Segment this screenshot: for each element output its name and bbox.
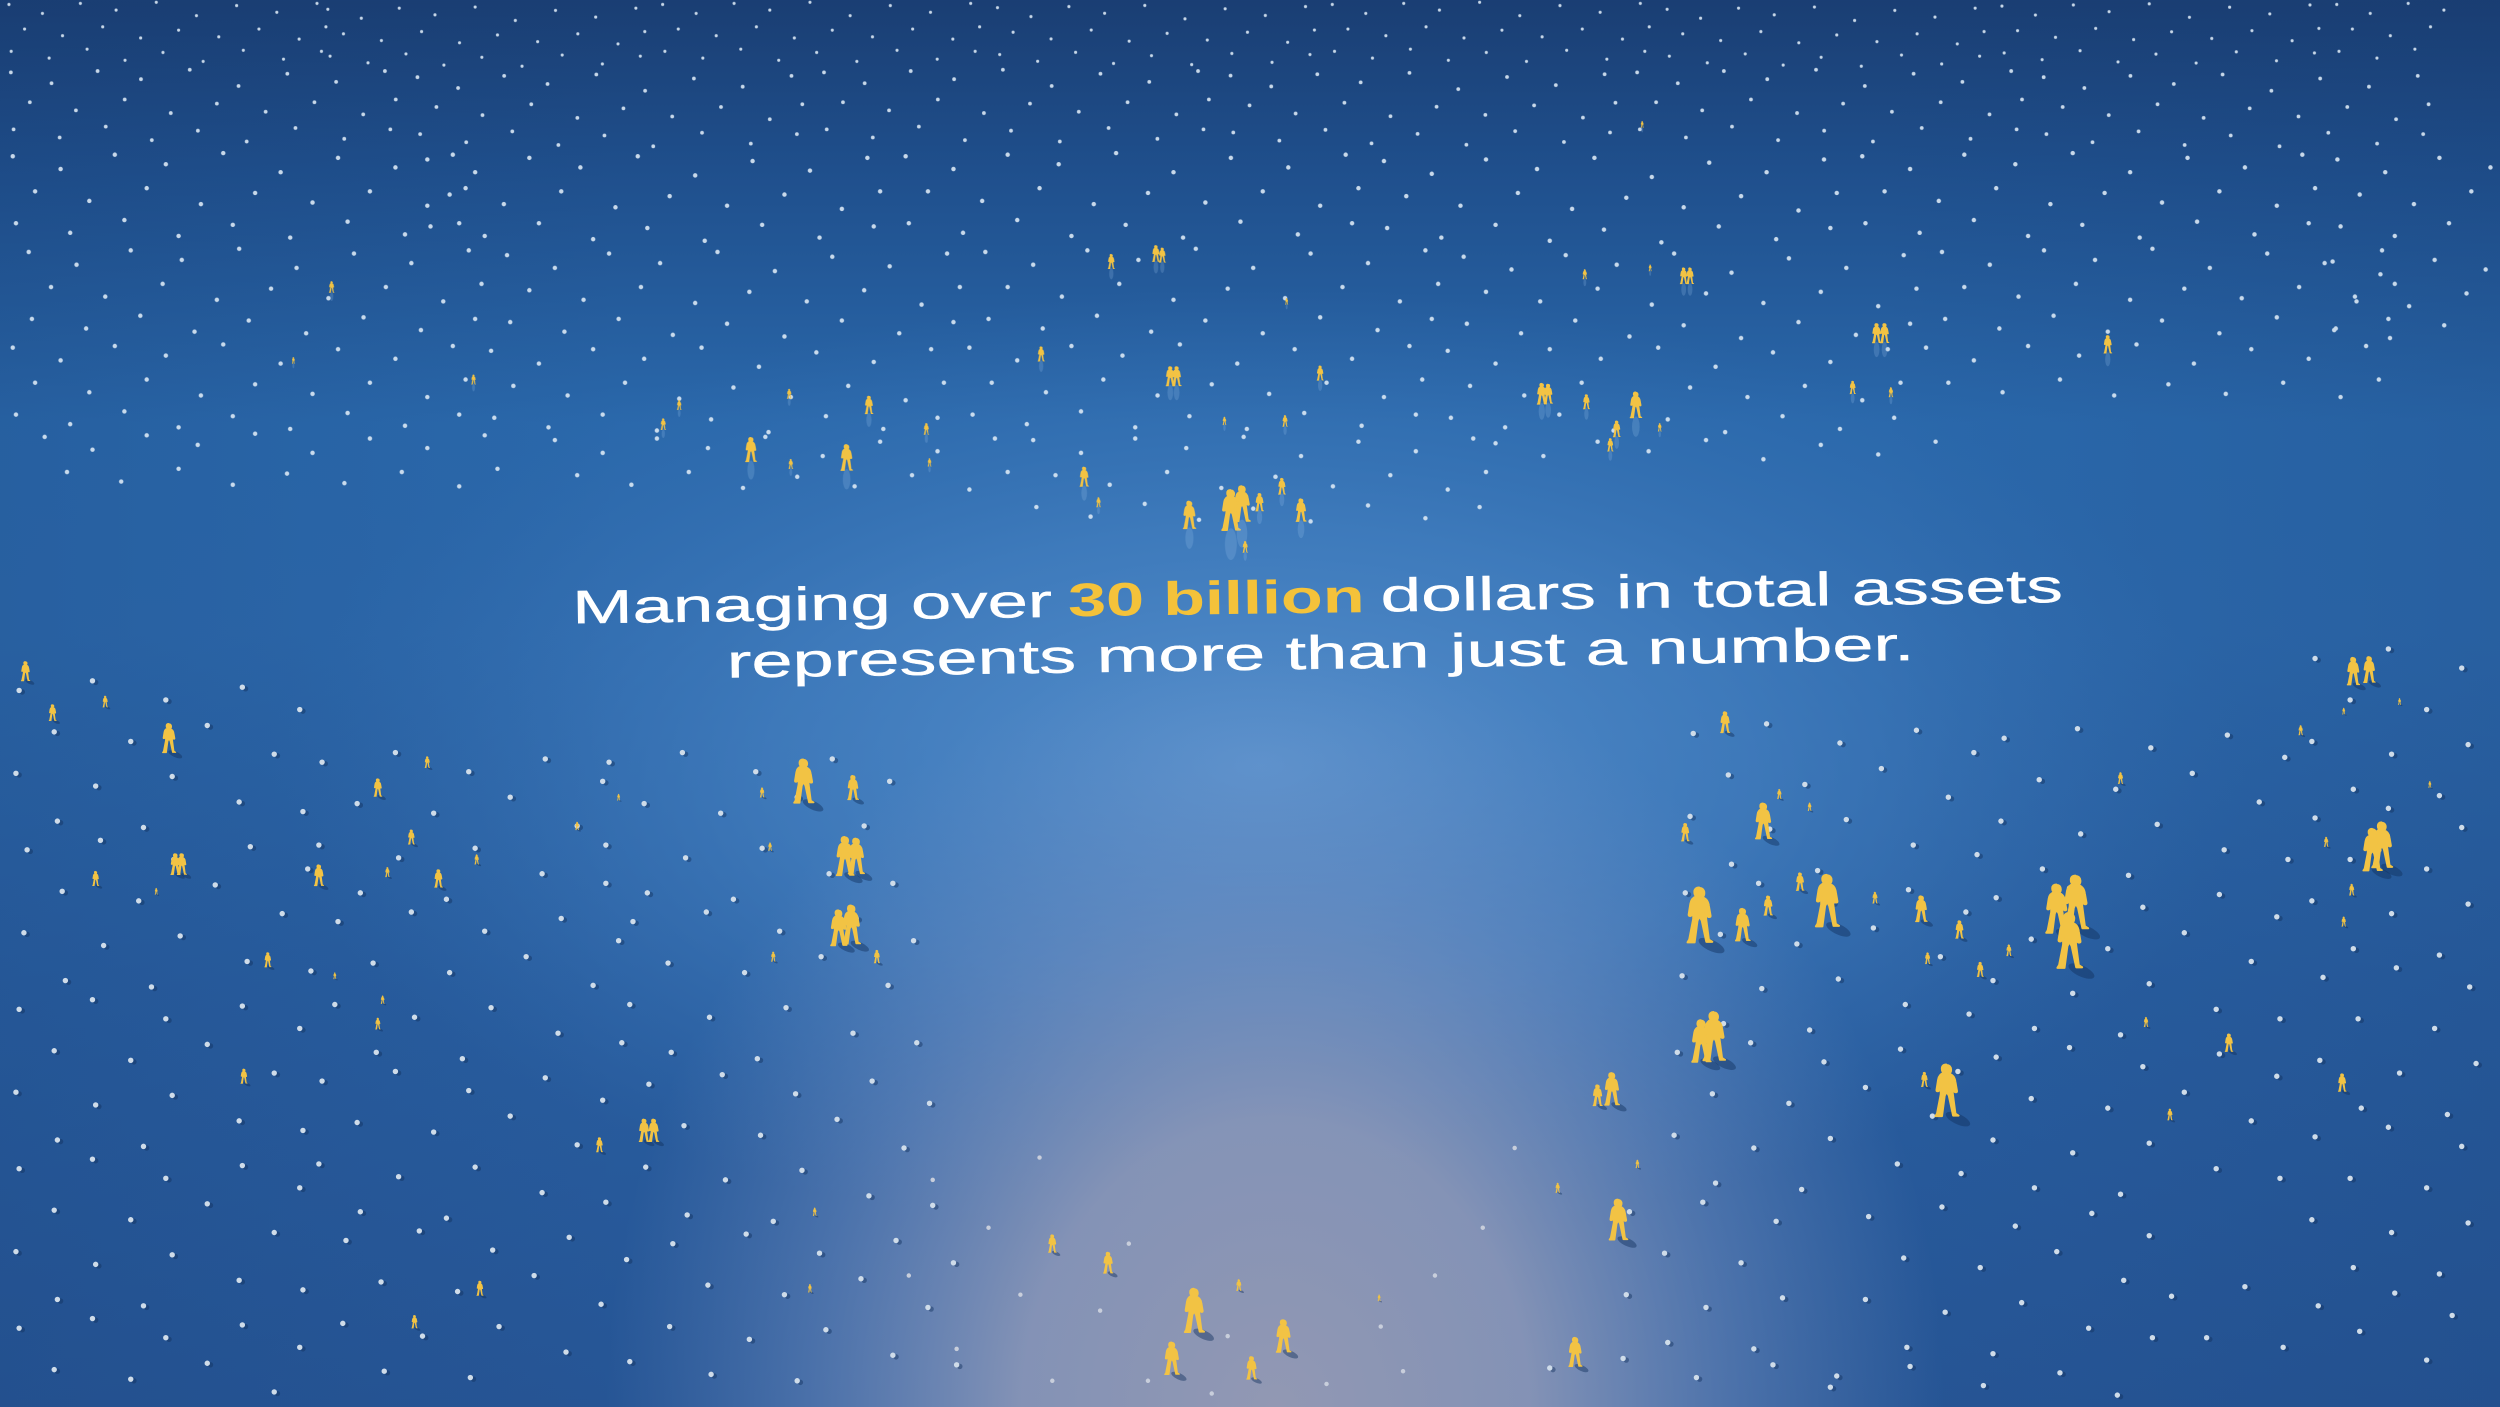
lower-right field of dots <box>1550 649 2479 1397</box>
people: lower-right yellow figures <box>1556 657 2433 1374</box>
headline line 1 <box>572 559 2063 633</box>
bottom-centre dots <box>909 1148 1515 1394</box>
people: lower-left yellow figures <box>21 662 883 1331</box>
headline line 1: 30 billion <box>1068 569 1365 626</box>
headline line 1: dollars in total assets <box>1380 559 2063 621</box>
upper field of small white dots <box>9 2 2490 521</box>
people: far crowd, yellow figures <box>292 121 2112 561</box>
headline line 2: represents more than just a number. <box>726 617 1915 688</box>
headline line 1: Managing over <box>572 574 1052 633</box>
people: bottom-centre yellow figures <box>1048 1235 1382 1385</box>
headline text <box>572 559 2063 688</box>
lower-left field of dots <box>16 681 960 1394</box>
